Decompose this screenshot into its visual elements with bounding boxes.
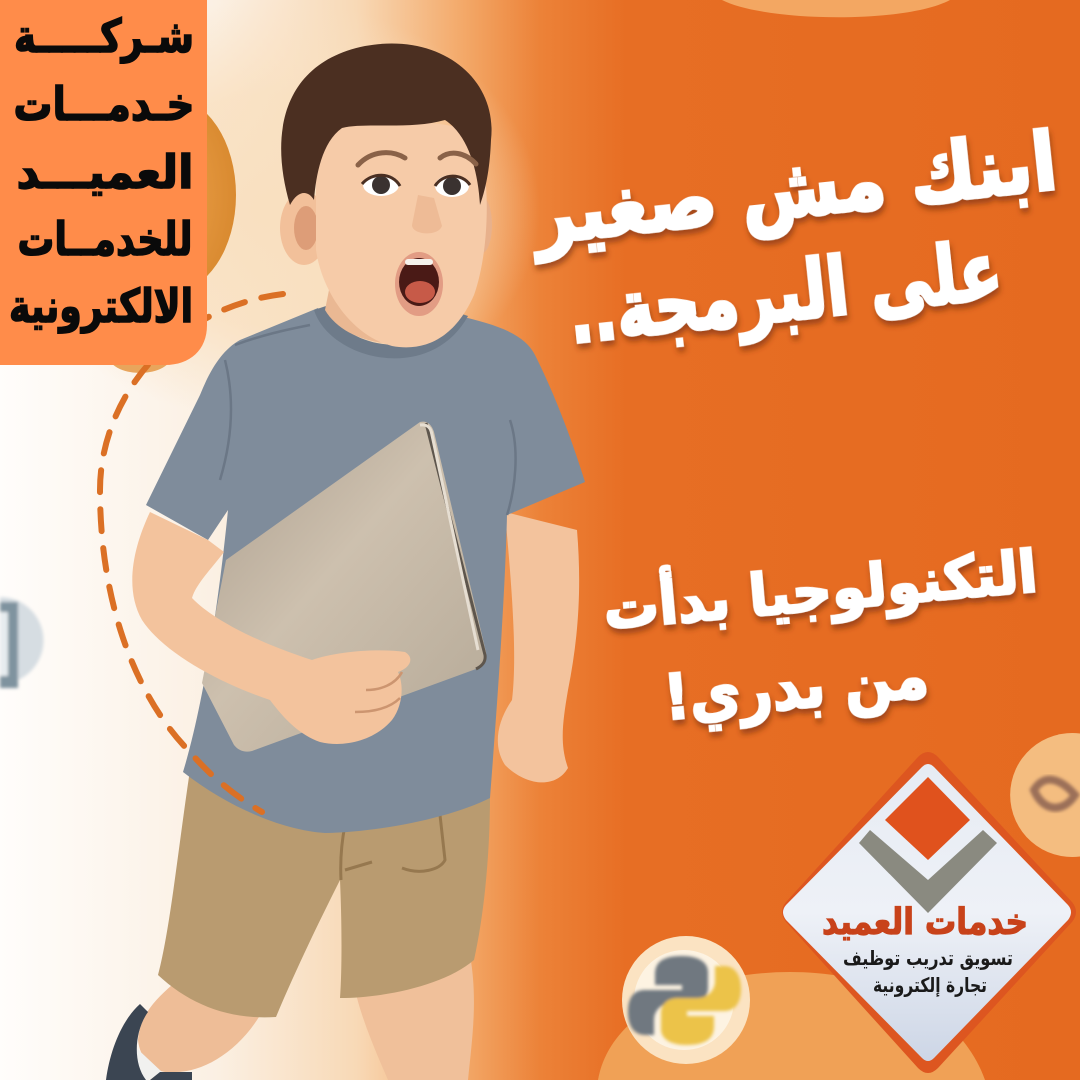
decorative sphere bottom of panel [108,337,172,373]
boy left leg and shoe [106,985,262,1080]
icon: blurred gray computer at left edge [0,597,44,688]
left ear [280,191,328,265]
panel text line 2: خـدمـــات [14,77,194,131]
logo: diamond badge [782,752,1076,1073]
logo tagline 2: تجارة إلكترونية [873,973,987,997]
nose [412,195,442,233]
icon: python logo badge [622,936,750,1064]
subheading line 2: من بدري! [661,639,931,734]
decorative circle top [722,0,950,17]
panel text line 3: العميـــد [16,145,194,199]
finger lines [355,672,402,712]
illustration: boy running with laptop [106,43,585,1080]
boy t-shirt [146,308,585,833]
logo tagline 1: تسويق تدريب توظيف [843,946,1013,970]
eyebrows [358,153,476,165]
right arm [498,512,579,782]
hair [281,43,492,205]
shirt highlights [220,325,516,515]
face [316,121,487,347]
subheading line 1: التكنولوجيا بدأت [600,533,1040,644]
logo gray chevron [859,830,997,913]
neck [325,285,456,343]
boy shorts [158,770,490,1017]
boy right leg [355,955,474,1080]
decorative circle right with blurred icon [1010,733,1080,857]
shirt collar [314,306,468,358]
panel text line 5: الالكترونية [9,279,193,333]
logo orange diamond [885,777,970,860]
mouth [395,252,443,316]
right ear [472,197,492,253]
eyes [362,174,470,197]
logo name: خدمات العميد [822,902,1028,943]
decorative blob bottom [598,972,985,1080]
dashed arc [100,294,283,812]
panel text line 1: شـركـــــة [14,9,194,63]
panel text line 4: للخدمــات [18,212,192,266]
laptop [202,422,486,752]
panel: company name [0,0,207,365]
decorative sphere behind panel [104,97,236,293]
shorts shading [341,815,445,880]
left arm and hand [132,512,410,744]
background cream upper-left wash [0,0,540,420]
